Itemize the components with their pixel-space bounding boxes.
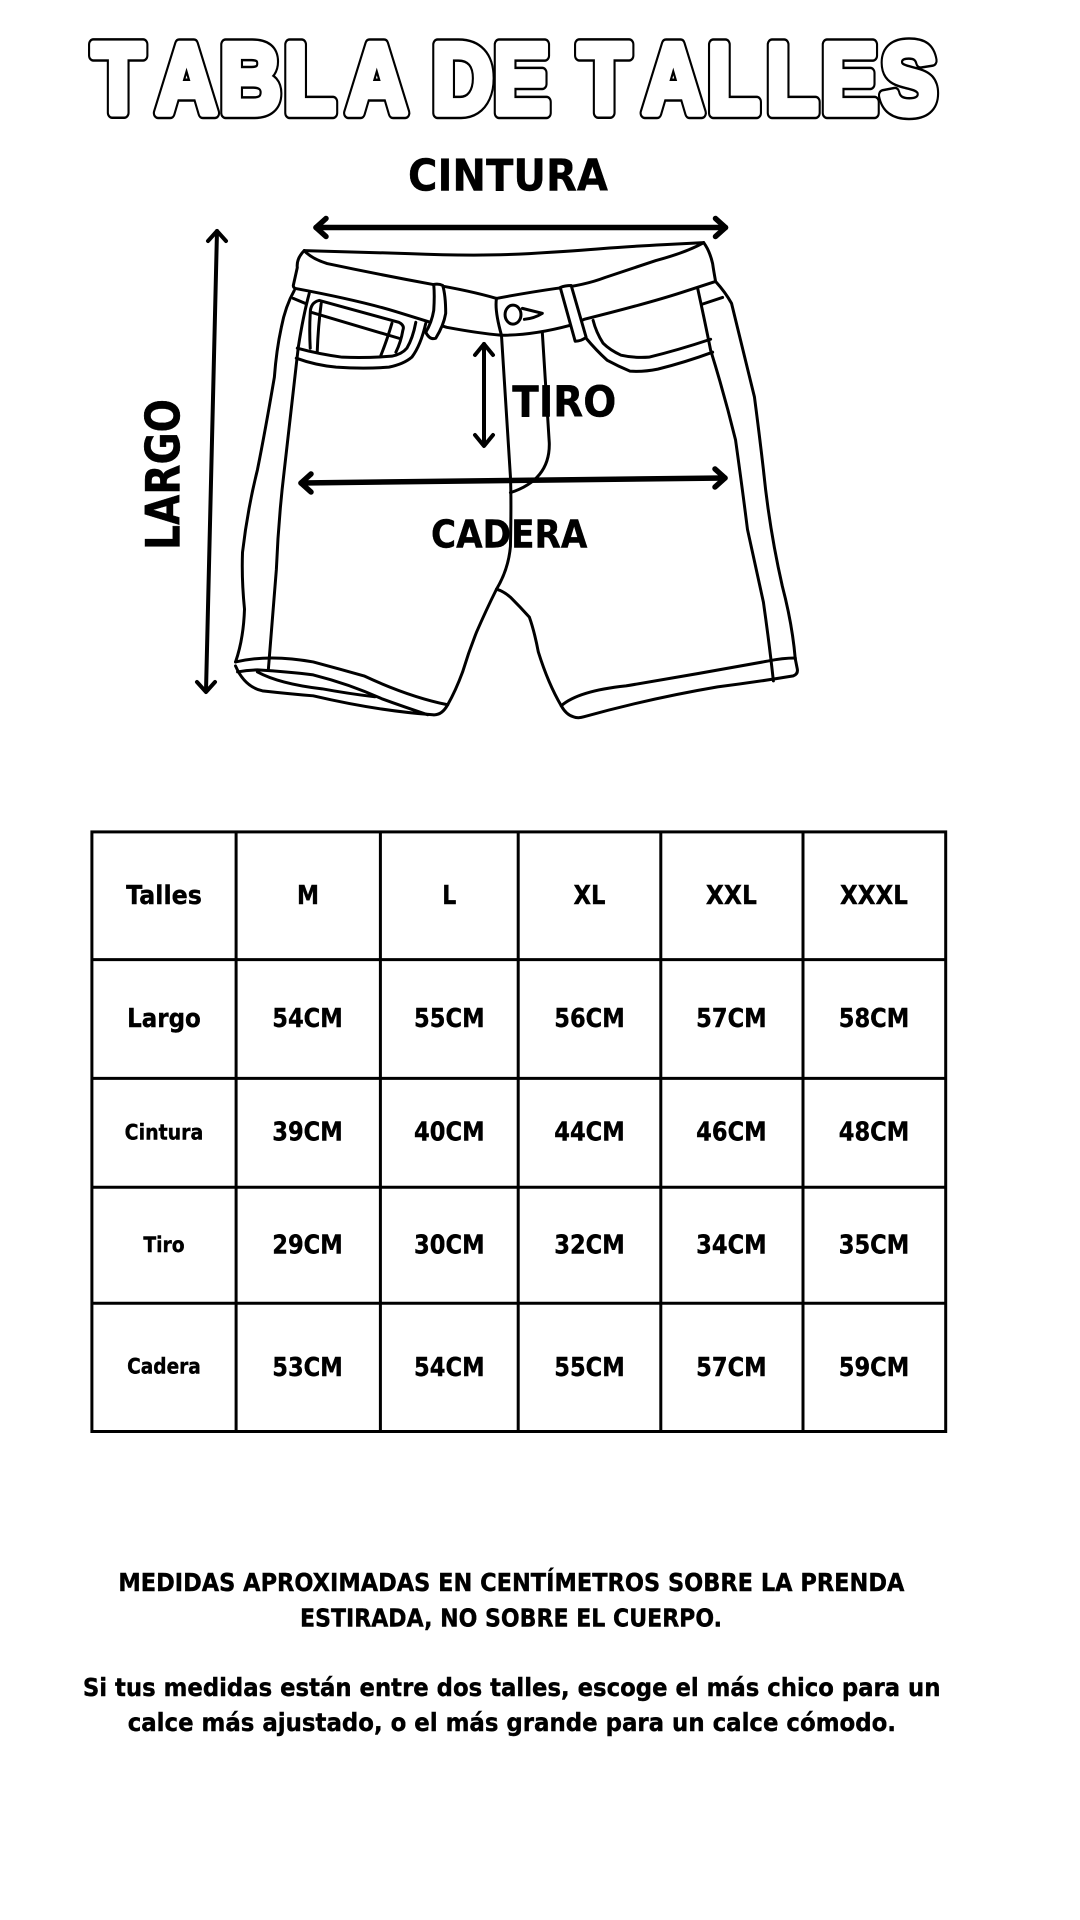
arrow: largo <box>197 231 226 692</box>
note: measurement disclaimer: ESTIRADA, NO SOBRE EL CUERPO. <box>300 1603 722 1632</box>
label: largo: LARGO <box>136 399 192 550</box>
title: TABLA DE TALLES <box>92 23 937 135</box>
inner legs <box>448 589 797 718</box>
size table <box>92 832 946 1432</box>
arrow: tiro <box>475 344 493 446</box>
right side seam and leg <box>698 281 795 681</box>
header row: M <box>297 881 319 911</box>
row: cadera: 57CM <box>696 1353 767 1383</box>
waistband <box>293 243 716 335</box>
row: largo <box>127 1004 909 1034</box>
title: TABLA DE TALLES <box>92 23 937 135</box>
note: size advice <box>83 1673 940 1737</box>
row: cintura: 46CM <box>696 1118 767 1148</box>
belt loops <box>426 284 586 341</box>
label: cadera: CADERA <box>431 512 588 558</box>
header row: XL <box>574 881 606 911</box>
row: cintura: Cintura <box>125 1121 203 1145</box>
row: largo: 57CM <box>696 1004 767 1034</box>
row: cintura: 48CM <box>839 1118 909 1148</box>
note: size advice: Si tus medidas están entre dos talles, escoge el más chico para un <box>83 1673 940 1702</box>
row: largo: 55CM <box>414 1004 485 1034</box>
left hem <box>236 658 448 715</box>
header row <box>126 881 908 911</box>
row: tiro: 30CM <box>414 1231 485 1261</box>
row: largo: Largo <box>127 1004 201 1034</box>
shorts line drawing <box>236 243 797 718</box>
row: cintura <box>125 1118 909 1148</box>
arrow: cadera <box>301 469 725 492</box>
row: cadera: Cadera <box>127 1355 201 1379</box>
arrow: cintura <box>316 218 726 236</box>
left pocket <box>296 300 426 368</box>
row: cintura: 39CM <box>272 1118 343 1148</box>
row: cadera <box>127 1353 909 1383</box>
row: cadera: 55CM <box>554 1353 625 1383</box>
header row: Talles <box>126 881 202 911</box>
fly and button <box>496 298 549 589</box>
row: largo: 54CM <box>272 1004 343 1034</box>
right hem <box>561 658 795 706</box>
row: cintura: 40CM <box>414 1118 485 1148</box>
row: tiro <box>143 1231 909 1261</box>
header row: XXL <box>706 881 757 911</box>
row: cadera: 54CM <box>414 1353 485 1383</box>
row: tiro: 32CM <box>554 1231 625 1261</box>
header row: L <box>442 881 456 911</box>
row: tiro: 35CM <box>839 1231 909 1261</box>
row: cintura: 44CM <box>554 1118 625 1148</box>
label: tiro: TIRO <box>512 378 616 428</box>
row: tiro: 29CM <box>272 1231 343 1261</box>
row: largo: 56CM <box>554 1004 625 1034</box>
row: tiro: 34CM <box>696 1231 767 1261</box>
label: cintura: CINTURA <box>408 152 608 202</box>
row: tiro: Tiro <box>143 1233 185 1257</box>
left side seam and leg <box>236 290 309 669</box>
note: size advice: calce más ajustado, o el más grande para un calce cómodo. <box>128 1708 896 1737</box>
row: cadera: 59CM <box>839 1353 909 1383</box>
row: largo: 58CM <box>839 1004 909 1034</box>
header row: XXXL <box>840 881 908 911</box>
right pocket <box>586 320 713 371</box>
note: measurement disclaimer <box>118 1568 904 1632</box>
table grid <box>92 832 946 1432</box>
note: measurement disclaimer: MEDIDAS APROXIMADAS EN CENTÍMETROS SOBRE LA PRENDA <box>118 1568 904 1597</box>
row: cadera: 53CM <box>272 1353 343 1383</box>
